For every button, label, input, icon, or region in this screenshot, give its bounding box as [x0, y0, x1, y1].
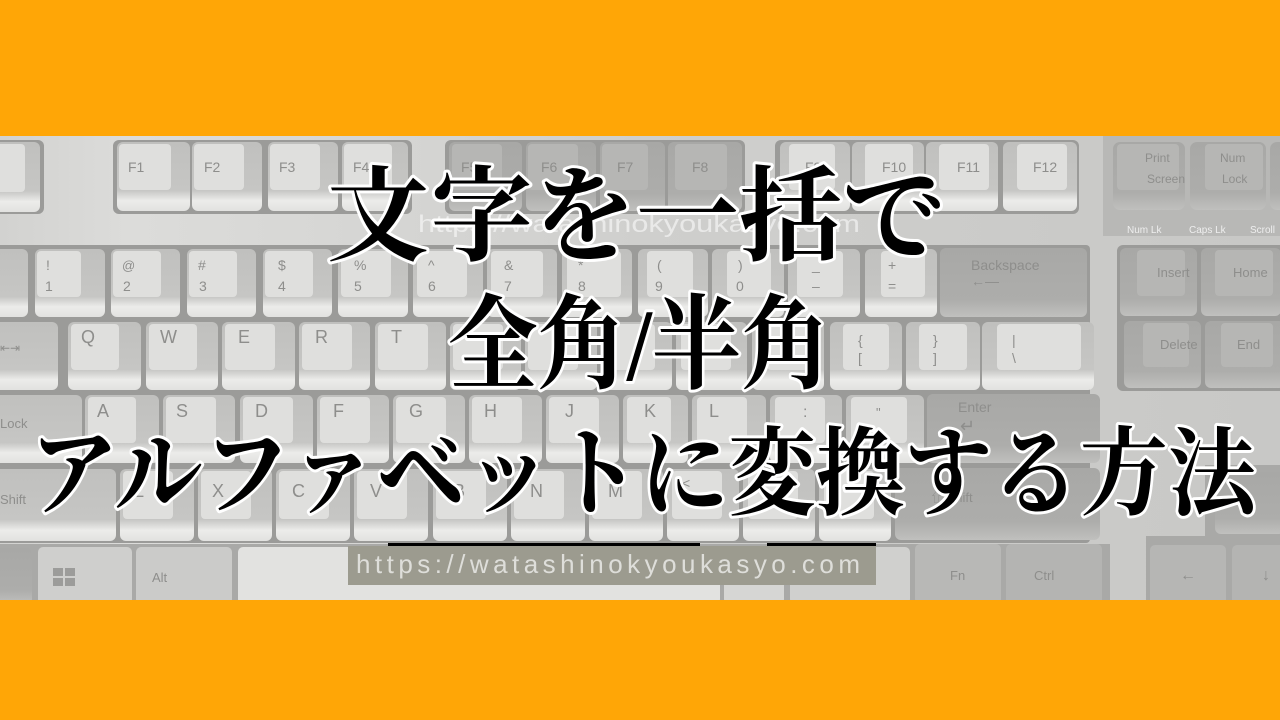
number key row: % [354, 257, 366, 273]
number key row: 1 [45, 278, 53, 294]
qwerty key row [0, 322, 1094, 390]
number key row: 7 [504, 278, 512, 294]
function key row: F7 [617, 159, 634, 175]
number key row [0, 248, 1087, 317]
number key row: 2 [123, 278, 131, 294]
url badge [348, 543, 876, 585]
space bar key row: ← [1180, 567, 1196, 584]
function key row: F6 [541, 159, 558, 175]
number key row: _ [811, 257, 820, 273]
function key row: F3 [279, 159, 296, 175]
number key row: 8 [578, 278, 586, 294]
navigation key cluster [1120, 248, 1280, 388]
space bar key row: Fn [950, 568, 965, 583]
print screen and num lock keys: Lock [1222, 172, 1248, 186]
print screen and num lock keys: Scroll [1250, 225, 1275, 236]
number key row: ( [657, 257, 662, 273]
home key row: Enter [958, 399, 992, 415]
navigation key cluster: Delete [1160, 337, 1198, 352]
home key row: F [333, 401, 344, 421]
number key row: ) [738, 257, 743, 273]
qwerty key row: | [1012, 332, 1016, 348]
qwerty key row: \ [1012, 350, 1016, 366]
number key row: # [198, 257, 206, 273]
function key row: F12 [1033, 159, 1057, 175]
space bar key row: Alt [152, 570, 168, 585]
qwerty key row: ⇤⇥ [0, 341, 20, 355]
number key row: $ [278, 257, 286, 273]
space bar key row: ↓ [1262, 567, 1270, 584]
function key row: F2 [204, 159, 221, 175]
home key row: S [176, 401, 188, 421]
number key row: ^ [428, 257, 435, 273]
number key row: * [578, 257, 584, 273]
home key row: ↵ [960, 416, 975, 436]
title [30, 161, 1263, 528]
function key row: F4 [353, 159, 370, 175]
navigation key cluster: End [1237, 337, 1260, 352]
space bar key row [0, 544, 1280, 604]
qwerty key row: E [238, 327, 250, 347]
home key row: Lock [0, 416, 28, 431]
print screen and num lock keys: Caps Lk [1189, 225, 1227, 236]
qwerty key row: W [160, 327, 177, 347]
number key row: 0 [736, 278, 744, 294]
bottom letter key row [0, 468, 1280, 541]
home key row: J [565, 401, 574, 421]
function key row: F8 [692, 159, 709, 175]
watermark url: https://watashinokyoukasyo.com [418, 211, 860, 238]
bottom letter key row: C [292, 481, 305, 501]
title: 文字を一括で [327, 161, 945, 275]
icon: windows logo [53, 568, 75, 586]
number key row: – [812, 278, 820, 294]
number key row: @ [122, 258, 135, 273]
navigation key cluster: Home [1233, 265, 1268, 280]
bottom letter key row: B [453, 481, 465, 501]
function key row: F5 [461, 159, 478, 175]
qwerty key row: R [315, 327, 328, 347]
home key row: " [876, 405, 881, 420]
home key row: H [484, 401, 497, 421]
qwerty key row: [ [858, 350, 862, 366]
qwerty key row: T [391, 327, 402, 347]
print screen and num lock keys: Num [1220, 151, 1245, 165]
bottom letter key row: ⇧ Shift [930, 490, 973, 505]
bottom letter key row: N [530, 481, 543, 501]
function key row: F9 [805, 159, 822, 175]
number key row: ! [46, 257, 50, 273]
number key row: 3 [199, 278, 207, 294]
print screen and num lock keys [1113, 142, 1280, 236]
print screen and num lock keys: Print [1145, 151, 1170, 165]
function key row: F11 [957, 159, 980, 175]
qwerty key row: ] [933, 350, 937, 366]
number key row: + [888, 257, 896, 273]
number key row: Backspace [971, 257, 1040, 273]
home key row [0, 394, 1100, 463]
bottom letter key row: Shift [0, 492, 26, 507]
number key row: 9 [655, 278, 663, 294]
print screen and num lock keys: Screen [1147, 172, 1185, 186]
bottom letter key row: < [682, 475, 690, 491]
bottom letter key row: M [608, 481, 623, 501]
number key row: & [504, 257, 514, 273]
qwerty key row: Q [81, 327, 95, 347]
number key row: = [888, 278, 896, 294]
home key row: A [97, 401, 109, 421]
home key row: G [409, 401, 423, 421]
home key row: K [644, 401, 656, 421]
function key row [0, 142, 1077, 212]
url badge: https://watashinokyoukasyo.com [356, 549, 860, 579]
home key row: D [255, 401, 268, 421]
navigation key cluster: Insert [1157, 265, 1190, 280]
home key row: : [803, 404, 807, 421]
bottom letter key row: Z [133, 481, 144, 501]
number key row: 6 [428, 278, 436, 294]
number key row: ←— [971, 273, 999, 289]
function key row: F10 [882, 159, 906, 175]
qwerty key row: } [933, 332, 938, 348]
print screen and num lock keys: Num Lk [1127, 225, 1162, 236]
title: 全角/半角 [448, 289, 831, 403]
home key row: L [709, 401, 719, 421]
qwerty key row: { [858, 332, 863, 348]
bottom letter key row: V [370, 481, 382, 501]
number key row: 5 [354, 278, 362, 294]
number key row: 4 [278, 278, 286, 294]
space bar key row: Ctrl [1034, 568, 1054, 583]
panel: keyboard photo [0, 136, 1280, 606]
bottom letter key row: X [212, 481, 224, 501]
function key row: F1 [128, 159, 145, 175]
